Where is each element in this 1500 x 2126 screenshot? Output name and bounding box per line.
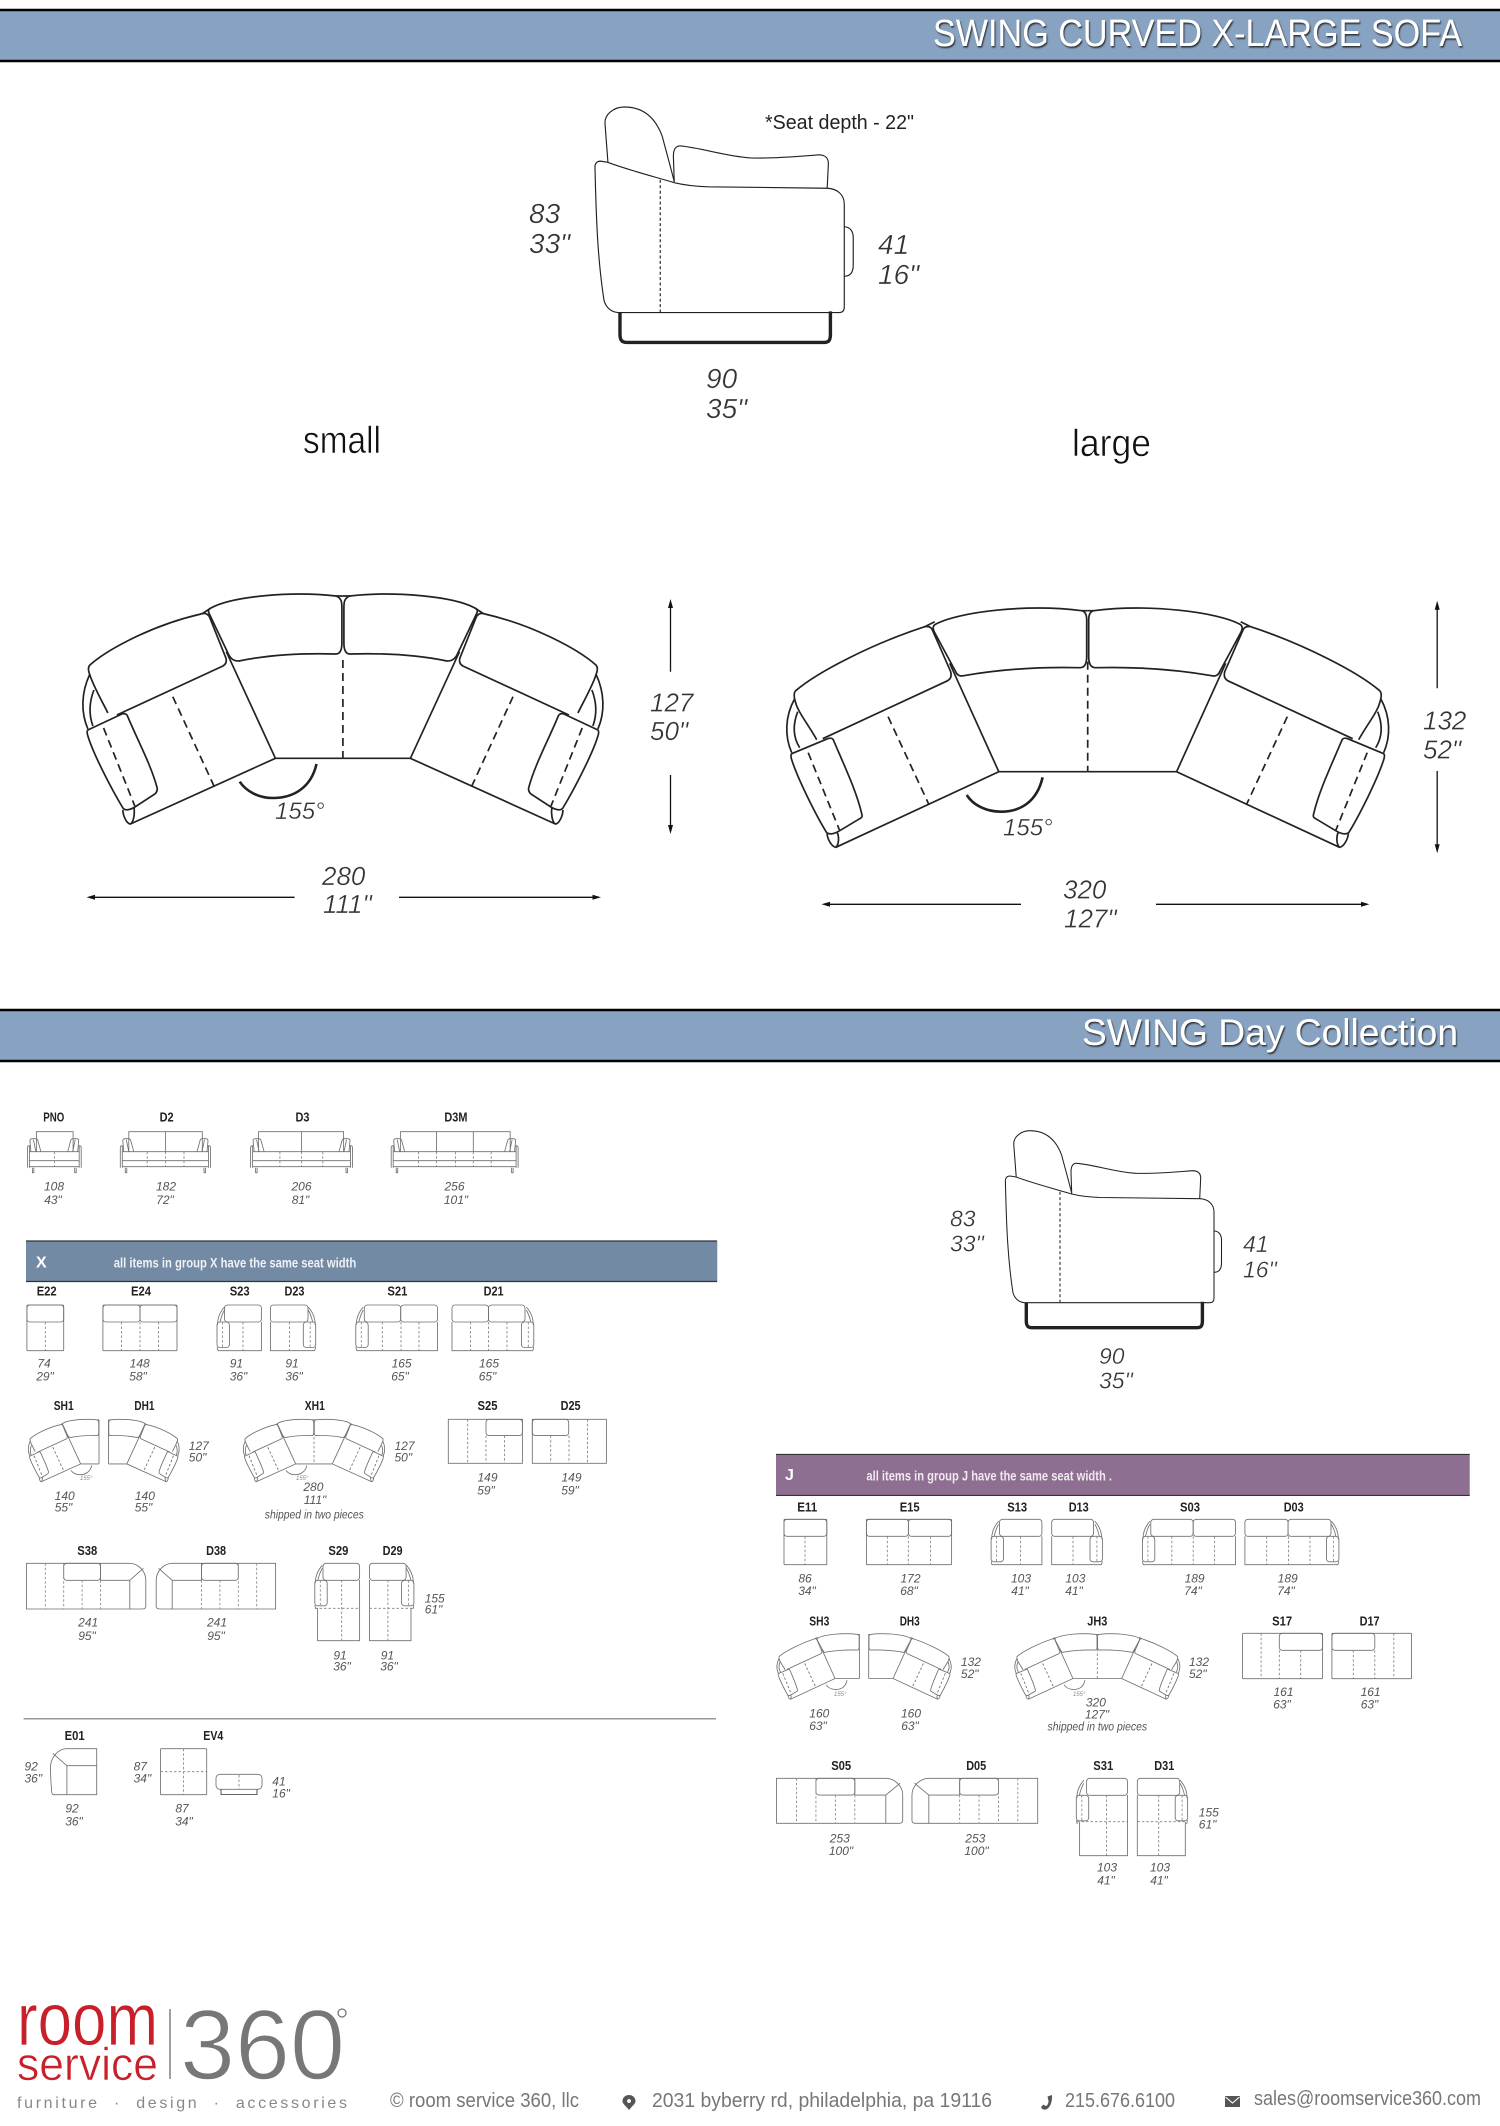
module S38 — [26, 1543, 146, 1643]
height dimension: 33" — [529, 228, 571, 259]
heading: large: large — [1072, 423, 1151, 465]
module S38: S38 — [77, 1543, 97, 1558]
module S25: S25 — [478, 1398, 498, 1413]
module D05: D05 — [966, 1758, 986, 1773]
module E24: 148 — [130, 1356, 150, 1370]
depth dimension: 90 — [1099, 1343, 1125, 1369]
height arrows — [668, 599, 673, 834]
front view module D3M: D3M — [444, 1110, 467, 1125]
module S29: 36" — [333, 1660, 352, 1674]
right side profile diagram with dimensions — [950, 1131, 1279, 1393]
seat height dimension: 16" — [1243, 1257, 1279, 1283]
module S21 — [356, 1284, 438, 1384]
height dimension: 132 — [1423, 705, 1466, 735]
footer phone: 215.676.6100 — [1065, 2090, 1175, 2112]
module E01: 36" — [65, 1815, 84, 1829]
module S21: S21 — [387, 1284, 407, 1299]
module D31: 103 — [1150, 1861, 1170, 1875]
module S05: S05 — [831, 1758, 851, 1773]
module DH1: 127 — [189, 1439, 209, 1453]
logo: room service 360 — [17, 1978, 346, 2100]
module D13 — [1052, 1500, 1102, 1598]
ottoman side view — [216, 1774, 262, 1794]
front view module D3M: 101" — [444, 1193, 469, 1207]
module SH3: 155° — [834, 1692, 847, 1698]
module D13: 103 — [1065, 1572, 1085, 1586]
front view module D2 — [120, 1110, 210, 1207]
module EV4 and ottoman: 87 — [134, 1760, 147, 1774]
module DH3: 132 — [961, 1655, 981, 1669]
module S23: 36" — [230, 1370, 248, 1384]
wordmark: 360: 360 — [180, 1989, 345, 2100]
front view module D2: 182 — [156, 1180, 176, 1194]
front view module PNO: 43" — [44, 1193, 63, 1207]
module D21 — [452, 1284, 534, 1384]
width dimension: 111" — [323, 889, 374, 919]
module E11: 34" — [798, 1584, 817, 1598]
module E22: 74 — [37, 1356, 51, 1370]
module XH1: 50" — [394, 1451, 413, 1465]
module D17: 161 — [1361, 1685, 1381, 1699]
tagline: furniture · design · accessories — [17, 2095, 347, 2112]
module D29 — [370, 1543, 445, 1674]
module E22 — [27, 1284, 64, 1384]
module S29: S29 — [328, 1543, 348, 1558]
module D17: 63" — [1361, 1698, 1379, 1712]
front view module D3: 206 — [291, 1180, 312, 1194]
module XH1: 111" — [304, 1493, 327, 1507]
module EV4 and ottoman: EV4 — [203, 1728, 224, 1743]
module D05: 100" — [964, 1844, 989, 1858]
module S03: S03 — [1180, 1500, 1200, 1515]
front view module D3M — [391, 1110, 518, 1207]
module S38: 241 — [78, 1616, 98, 1630]
module S03: 189 — [1185, 1572, 1205, 1586]
module SH1 — [28, 1398, 99, 1515]
module S17: 63" — [1273, 1698, 1292, 1712]
module E22: 29" — [35, 1370, 55, 1384]
module S21: 165 — [392, 1356, 412, 1370]
module D31: 61" — [1199, 1817, 1217, 1831]
header band: Swing Day Collection — [0, 1010, 1500, 1061]
module JH3: shipped in two pieces — [1048, 1720, 1147, 1734]
group X band — [26, 1241, 717, 1282]
module E01: E01 — [65, 1728, 85, 1743]
module D23: D23 — [284, 1284, 304, 1299]
module DH3 — [869, 1614, 981, 1733]
module D31: D31 — [1154, 1758, 1174, 1773]
module DH3: 63" — [901, 1719, 920, 1733]
module EV4 and ottoman: 16" — [272, 1787, 291, 1801]
module D17 — [1332, 1614, 1412, 1712]
width arrows — [86, 895, 601, 900]
module S17: S17 — [1272, 1614, 1292, 1629]
module S31: 41" — [1097, 1873, 1116, 1887]
module EV4 and ottoman: 87 — [175, 1802, 189, 1816]
module S25: 59" — [477, 1483, 496, 1497]
module XH1: 280 — [303, 1480, 323, 1494]
module EV4 and ottoman: 34" — [134, 1771, 152, 1785]
module DH1: 50" — [189, 1451, 207, 1465]
module D03: D03 — [1284, 1500, 1304, 1515]
width dimension: 280 — [322, 861, 365, 891]
module S21: 65" — [391, 1370, 410, 1384]
icon: map pin — [622, 2095, 636, 2110]
module D29: 61" — [425, 1602, 443, 1616]
module D38: 95" — [207, 1629, 226, 1643]
module S23: S23 — [230, 1284, 250, 1299]
height dimension: 83 — [529, 198, 560, 229]
module XH1: shipped in two pieces — [265, 1507, 364, 1521]
module JH3: JH3 — [1087, 1614, 1107, 1629]
height dimension: 52" — [1423, 734, 1463, 764]
seat height dimension: 16" — [878, 259, 920, 290]
module S03 — [1142, 1500, 1236, 1598]
height arrows — [1435, 601, 1440, 853]
module EV4 and ottoman: 34" — [175, 1815, 194, 1829]
module E15: 172 — [900, 1572, 921, 1586]
front view module PNO — [27, 1110, 81, 1207]
depth dimension: 90 — [706, 363, 737, 394]
title: SWING Day Collection — [1082, 1012, 1458, 1053]
module S13 — [991, 1500, 1042, 1598]
module D25: 149 — [561, 1471, 582, 1485]
front view module D2: D2 — [160, 1110, 174, 1125]
module S25 — [448, 1398, 522, 1497]
module E01: 36" — [24, 1771, 43, 1785]
group note: all items in group X have the same seat width — [114, 1255, 356, 1271]
seat depth note: *Seat depth - 22" — [765, 112, 914, 134]
depth dimension: 35" — [706, 393, 748, 424]
module XH1: 127 — [394, 1439, 415, 1453]
module S17 — [1242, 1614, 1323, 1712]
side profile drawing — [1005, 1131, 1222, 1328]
width dimension: 320 — [1063, 874, 1106, 904]
module S25: 149 — [477, 1471, 498, 1485]
height dimension: 83 — [950, 1206, 976, 1232]
module E01 — [24, 1728, 97, 1829]
front view module PNO: PNO — [43, 1110, 64, 1125]
module D25: 59" — [561, 1483, 580, 1497]
module S05 — [776, 1758, 903, 1858]
module S03: 74" — [1184, 1584, 1203, 1598]
module DH1: DH1 — [134, 1398, 154, 1413]
module S23 — [217, 1284, 261, 1384]
sofa outline — [83, 594, 603, 824]
seat height dimension: 41 — [878, 229, 909, 260]
module E01: 92 — [24, 1760, 38, 1774]
height dimension: 127 — [650, 688, 693, 718]
module DH1 — [108, 1398, 210, 1515]
icon: envelope — [1225, 2096, 1240, 2107]
module EV4 and ottoman: 41 — [272, 1775, 286, 1789]
module S05: 253 — [830, 1831, 850, 1845]
module D23 — [270, 1284, 316, 1384]
module D21: 165 — [479, 1356, 499, 1370]
module D03: 74" — [1277, 1584, 1296, 1598]
module D31 — [1137, 1758, 1219, 1887]
angle arc — [240, 764, 316, 798]
module JH3: 155° — [1073, 1692, 1086, 1698]
module DH3: 160 — [901, 1707, 921, 1721]
width dimension: 127" — [1064, 903, 1118, 933]
module E24: 58" — [129, 1370, 148, 1384]
angle label: 155° — [275, 798, 325, 825]
module S38: 95" — [78, 1629, 97, 1643]
front view module PNO: 108 — [44, 1180, 64, 1194]
front view module D3: D3 — [296, 1110, 310, 1125]
module D13: D13 — [1069, 1500, 1089, 1515]
header band: Swing Curved X-Large Sofa — [0, 9, 1500, 62]
depth dimension: 35" — [1099, 1367, 1135, 1393]
module SH1: 140 — [55, 1489, 75, 1503]
module S17: 161 — [1273, 1685, 1294, 1699]
module JH3: 127" — [1085, 1708, 1110, 1722]
module E01: 92 — [65, 1802, 79, 1816]
module D23: 91 — [285, 1356, 299, 1370]
module S29 — [315, 1543, 360, 1674]
module E11: 86 — [798, 1572, 812, 1586]
footer address: 2031 byberry rd, philadelphia, pa 19116 — [652, 2090, 992, 2112]
front view module D3M: 256 — [444, 1180, 465, 1194]
module SH3: SH3 — [809, 1614, 829, 1629]
module D03: 189 — [1278, 1572, 1298, 1586]
module D23: 36" — [285, 1370, 304, 1384]
module E22: E22 — [37, 1284, 57, 1299]
module D17: D17 — [1360, 1614, 1380, 1629]
module D29: 91 — [381, 1648, 394, 1662]
group letter: J — [785, 1467, 794, 1484]
module S13: 103 — [1011, 1572, 1031, 1586]
module D21: 65" — [479, 1370, 497, 1384]
front view module D3 — [251, 1110, 352, 1207]
footer email: sales@roomservice360.com — [1254, 2088, 1481, 2110]
module JH3: 320 — [1086, 1696, 1106, 1710]
module D05: 253 — [965, 1831, 985, 1845]
module E24 — [103, 1284, 177, 1384]
module S31: S31 — [1093, 1758, 1113, 1773]
module D13: 41" — [1065, 1584, 1084, 1598]
small curved sofa plan — [83, 594, 695, 919]
group J band — [776, 1454, 1470, 1496]
module E15 — [866, 1500, 952, 1598]
module XH1: 155° — [296, 1476, 309, 1482]
module E11 — [784, 1500, 827, 1598]
module D29: 155 — [425, 1591, 445, 1605]
module XH1 — [243, 1398, 416, 1521]
module E15: E15 — [900, 1500, 920, 1515]
module EV4 and ottoman — [134, 1728, 291, 1829]
seat height dimension: 41 — [1243, 1231, 1269, 1257]
module E24: E24 — [131, 1284, 152, 1299]
module D21: D21 — [484, 1284, 504, 1299]
angle arc — [967, 777, 1043, 812]
module D29: 36" — [380, 1660, 399, 1674]
sofa outline — [787, 608, 1389, 847]
module D03 — [1245, 1500, 1339, 1598]
module XH1: XH1 — [305, 1398, 325, 1413]
module D31: 155 — [1199, 1806, 1219, 1820]
angle label: 155° — [1003, 815, 1053, 842]
module S31: 103 — [1097, 1861, 1117, 1875]
module S31 — [1076, 1758, 1128, 1887]
footer copyright: © room service 360, llc — [390, 2090, 579, 2112]
module S23: 91 — [230, 1356, 243, 1370]
module DH3: DH3 — [900, 1614, 920, 1629]
module E15: 68" — [900, 1584, 919, 1598]
module S05: 100" — [829, 1844, 854, 1858]
icon: phone — [1041, 2095, 1052, 2110]
height dimension: 33" — [950, 1231, 986, 1257]
module D25: D25 — [561, 1398, 581, 1413]
module D25 — [532, 1398, 606, 1497]
module JH3: 132 — [1189, 1655, 1209, 1669]
module S13: 41" — [1011, 1584, 1030, 1598]
module DH3: 52" — [961, 1667, 979, 1681]
module E11: E11 — [797, 1500, 817, 1515]
group note: all items in group J have the same seat width . — [866, 1468, 1112, 1484]
module D38: 241 — [207, 1616, 227, 1630]
width arrows — [822, 902, 1369, 907]
module D05 — [912, 1758, 1038, 1858]
degree mark — [338, 2009, 346, 2017]
height dimension: 50" — [650, 716, 690, 746]
module SH1: 55" — [55, 1501, 73, 1515]
module D31: 41" — [1150, 1873, 1169, 1887]
heading: small: small — [303, 420, 381, 462]
module D38: D38 — [206, 1543, 226, 1558]
wordmark: room: room — [17, 1978, 158, 2061]
module DH1: 55" — [135, 1501, 153, 1515]
module S29: 91 — [333, 1648, 347, 1662]
front view module D2: 72" — [156, 1193, 175, 1207]
front view module D3: 81" — [292, 1193, 310, 1207]
side profile drawing — [595, 107, 853, 342]
module SH3 — [777, 1614, 859, 1733]
module SH3: 63" — [809, 1719, 828, 1733]
module SH1: SH1 — [54, 1398, 74, 1413]
module SH1: 155° — [80, 1476, 93, 1482]
module JH3 — [1015, 1614, 1209, 1734]
module S13: S13 — [1007, 1500, 1027, 1515]
wordmark: service: service — [17, 2038, 158, 2090]
module D38 — [156, 1543, 276, 1643]
large curved sofa plan — [787, 601, 1467, 933]
group letter: X — [36, 1255, 47, 1272]
module JH3: 52" — [1189, 1667, 1207, 1681]
side profile sofa diagram with dimensions — [529, 107, 920, 424]
module D29: D29 — [383, 1543, 403, 1558]
module SH3: 160 — [809, 1707, 829, 1721]
module DH1: 140 — [135, 1489, 155, 1503]
